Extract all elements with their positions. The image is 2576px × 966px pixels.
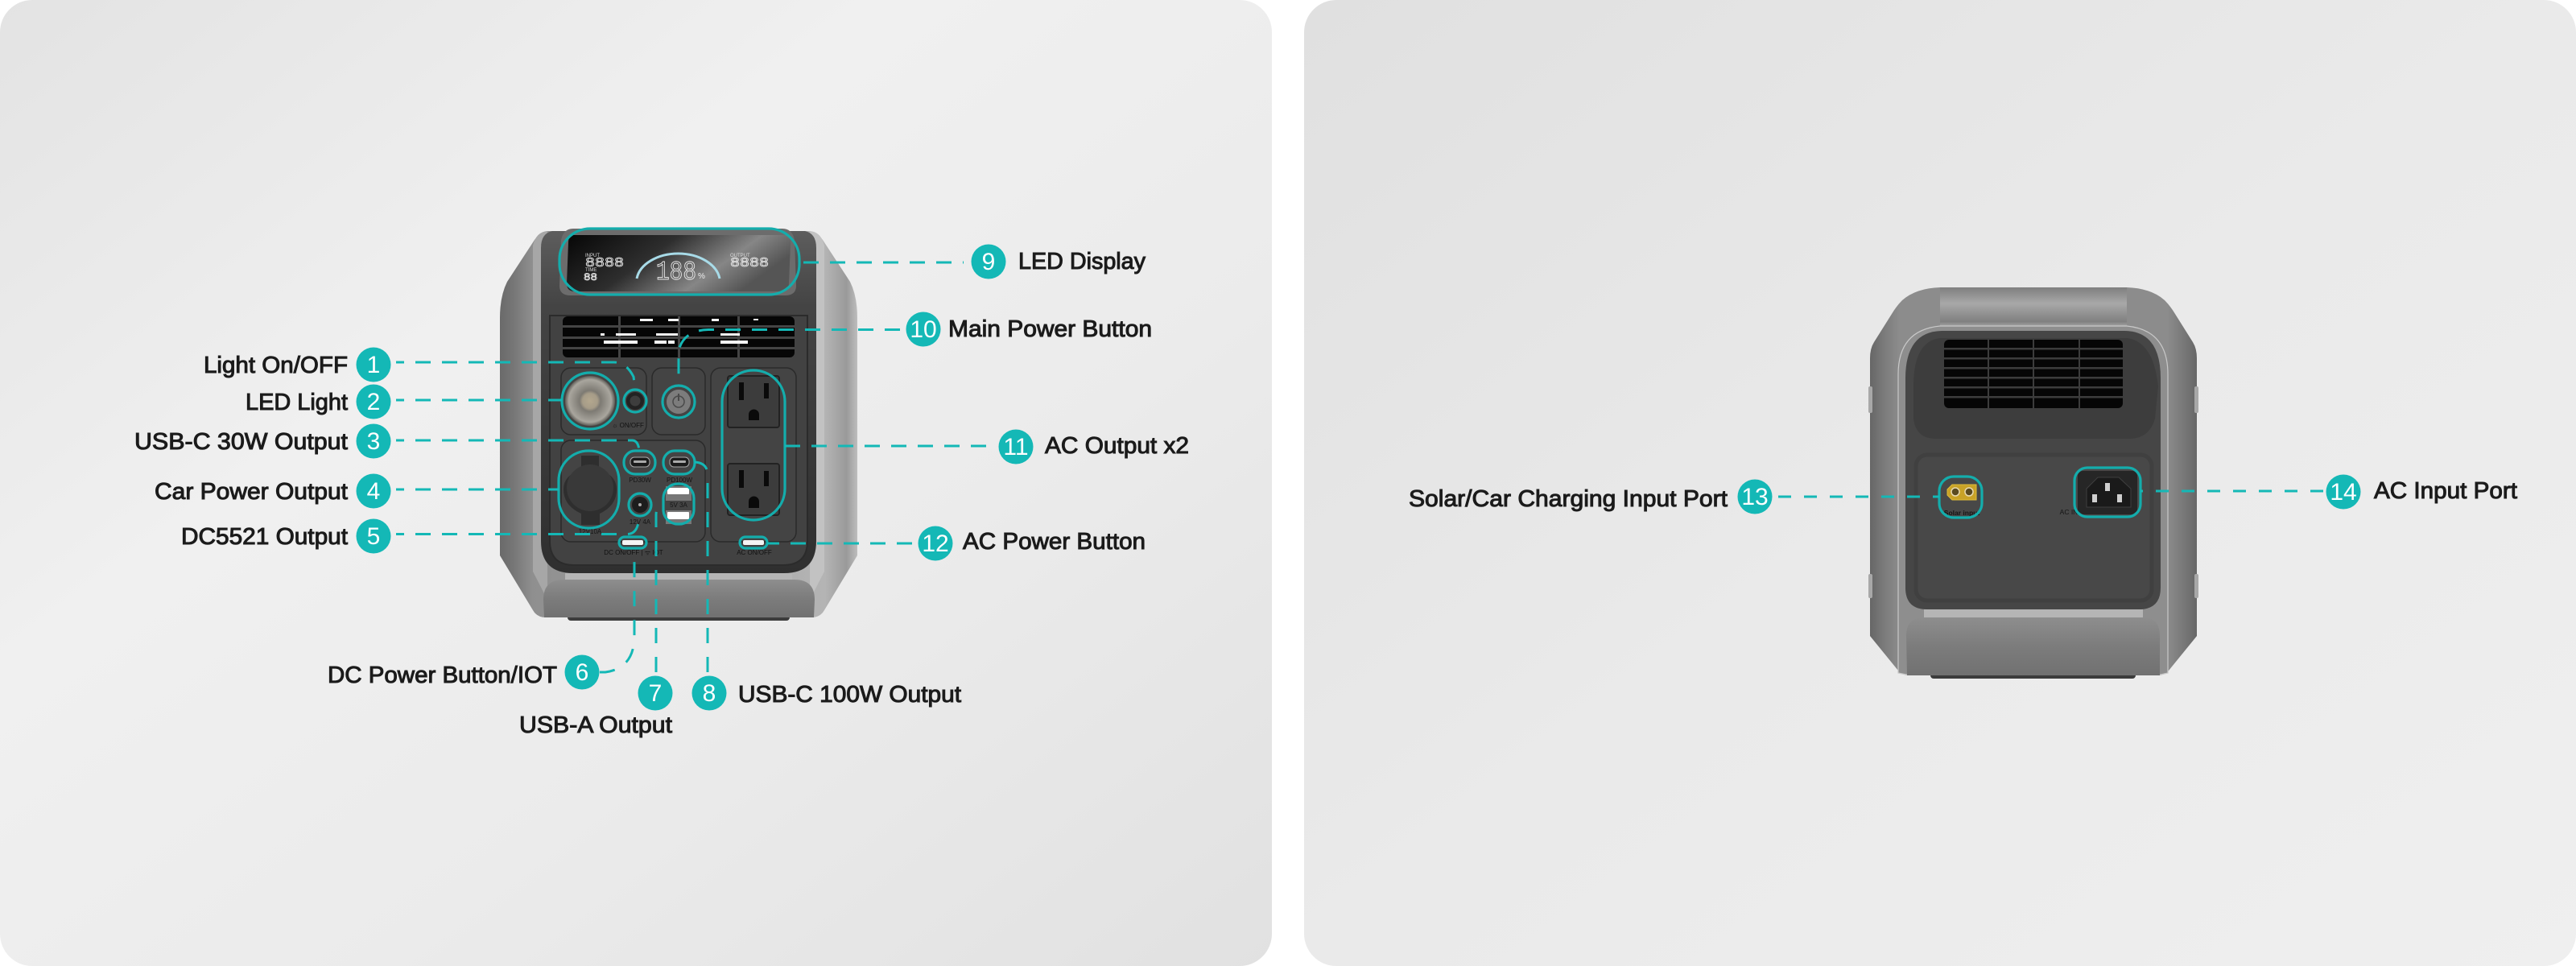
callout 11: 11: [1003, 434, 1029, 460]
callout 10: [906, 312, 1152, 346]
callout 2: LED Light: [246, 390, 348, 415]
LCD display: 8888: [730, 256, 769, 271]
callout 12: AC Power Button: [963, 529, 1146, 555]
callout 4: [155, 473, 391, 509]
USB-A ports: 5V 3A: [670, 502, 688, 509]
callout 14: [2326, 475, 2517, 509]
callout 13: Solar/Car Charging Input Port: [1409, 486, 1728, 512]
lower strip: [565, 573, 792, 580]
device: front view: [500, 229, 857, 621]
highlight rings: rear ports: [1939, 468, 2140, 518]
AC IN label: AC IN: [2060, 508, 2078, 516]
callout 7: [519, 676, 673, 738]
callout 2: [246, 385, 391, 419]
callout 10: Main Power Button: [948, 316, 1152, 342]
AC inlet: [2078, 471, 2137, 514]
outer shell: [1870, 287, 2197, 675]
callout 5: [181, 518, 391, 554]
AC outlet top: [728, 376, 779, 427]
bumper: [543, 580, 815, 617]
port labels: [629, 477, 692, 526]
button labels: [604, 549, 772, 556]
car label: 12V10A: [579, 528, 602, 535]
vent: [563, 316, 795, 357]
inner plate: [550, 316, 807, 565]
button labels: DC ON/OFF | ᯤ IOT: [604, 549, 663, 556]
LCD display: [567, 235, 791, 291]
callout 1: Light On/OFF: [204, 353, 348, 378]
DC 5521 port: [632, 497, 648, 513]
callout 8: [692, 676, 961, 710]
callout 1: [204, 348, 391, 382]
LCD display: 8888: [585, 256, 624, 271]
foot shadow: [568, 612, 790, 621]
highlight rings: front ports: [559, 229, 799, 548]
port labels: PD30W: [629, 477, 651, 484]
callout 9: LED Display: [1018, 249, 1146, 275]
callout 4: 4: [367, 478, 380, 505]
outer shell: [500, 231, 857, 617]
callout 7: 7: [649, 680, 662, 707]
LCD display: 188: [656, 258, 696, 287]
callout 7: USB-A Output: [519, 712, 672, 738]
LCD display: INPUT: [585, 254, 600, 258]
LCD display: TIME: [585, 268, 597, 273]
callout 13: [1409, 480, 1773, 514]
main power button: [667, 390, 691, 414]
callout 14: AC Input Port: [2374, 478, 2517, 504]
callout 6: 6: [576, 659, 588, 686]
port labels: 12V 4A: [630, 518, 651, 526]
dark body: [1905, 331, 2161, 609]
panel: LED light module: [561, 368, 646, 435]
callout 4: Car Power Output: [155, 479, 348, 505]
display bezel: [559, 229, 796, 295]
callout 1: 1: [367, 352, 380, 378]
solar label: Solar input: [1944, 509, 1979, 517]
callout 6: [328, 655, 599, 689]
panel: main button module: [652, 368, 705, 435]
LCD display: 88: [584, 271, 597, 283]
top panel: [1940, 287, 2127, 328]
light label: ☼ ON/OFF: [612, 422, 644, 429]
vent recess: [1913, 338, 2158, 439]
callout 8: USB-C 100W Output: [738, 682, 961, 708]
LCD display: OUTPUT: [730, 254, 750, 258]
callout 10: 10: [910, 316, 937, 343]
dark body: [541, 231, 816, 573]
lower panel: [1916, 455, 2152, 601]
callout 2: 2: [367, 389, 380, 415]
rear vent: [1944, 340, 2123, 408]
LED light: [565, 376, 615, 426]
callout 8: 8: [703, 680, 716, 707]
side strips: [533, 231, 547, 600]
panel: front view background: [0, 0, 1272, 966]
light button: [626, 392, 644, 410]
button labels: AC ON/OFF: [737, 549, 772, 556]
leader lines: rear: [1778, 491, 2323, 497]
callout 9: [971, 245, 1146, 279]
callout 3: USB-C 30W Output: [134, 429, 348, 455]
callout 6: DC Power Button/IOT: [328, 663, 557, 688]
car socket: [564, 456, 617, 525]
solar XT60 port: [1947, 485, 1976, 500]
callout 12: [918, 526, 1146, 560]
port labels: PD100W: [667, 477, 692, 484]
USB-A ports: [666, 486, 691, 524]
panel: DC module: [561, 440, 705, 542]
leader lines: front: [396, 262, 994, 672]
callout 12: 12: [922, 530, 949, 557]
callout 11: [998, 430, 1189, 464]
LCD display: %: [698, 272, 705, 281]
USB-C 30W port: [630, 457, 650, 467]
callout 14: 14: [2330, 479, 2357, 506]
foot shadow: [1930, 668, 2136, 679]
strip: [1924, 609, 2143, 617]
DC button: [622, 540, 643, 545]
callout 13: 13: [1741, 484, 1769, 510]
AC button: [743, 540, 764, 545]
side strips: [1898, 326, 2168, 675]
panel: rear view background: [1304, 0, 2576, 966]
AC outlet bottom: [728, 464, 779, 515]
bumper: [1906, 617, 2160, 675]
device: rear view: [1868, 287, 2198, 679]
callout 9: 9: [982, 249, 995, 275]
USB-C 100W port: [670, 457, 689, 467]
panel: AC module: [711, 368, 796, 542]
side nubs: [1868, 386, 2198, 598]
callout 3: 3: [367, 428, 380, 455]
callout 3: [134, 423, 391, 459]
callout 5: DC5521 Output: [181, 524, 348, 550]
callout 5: 5: [367, 523, 380, 550]
callout 11: AC Output x2: [1045, 433, 1189, 459]
